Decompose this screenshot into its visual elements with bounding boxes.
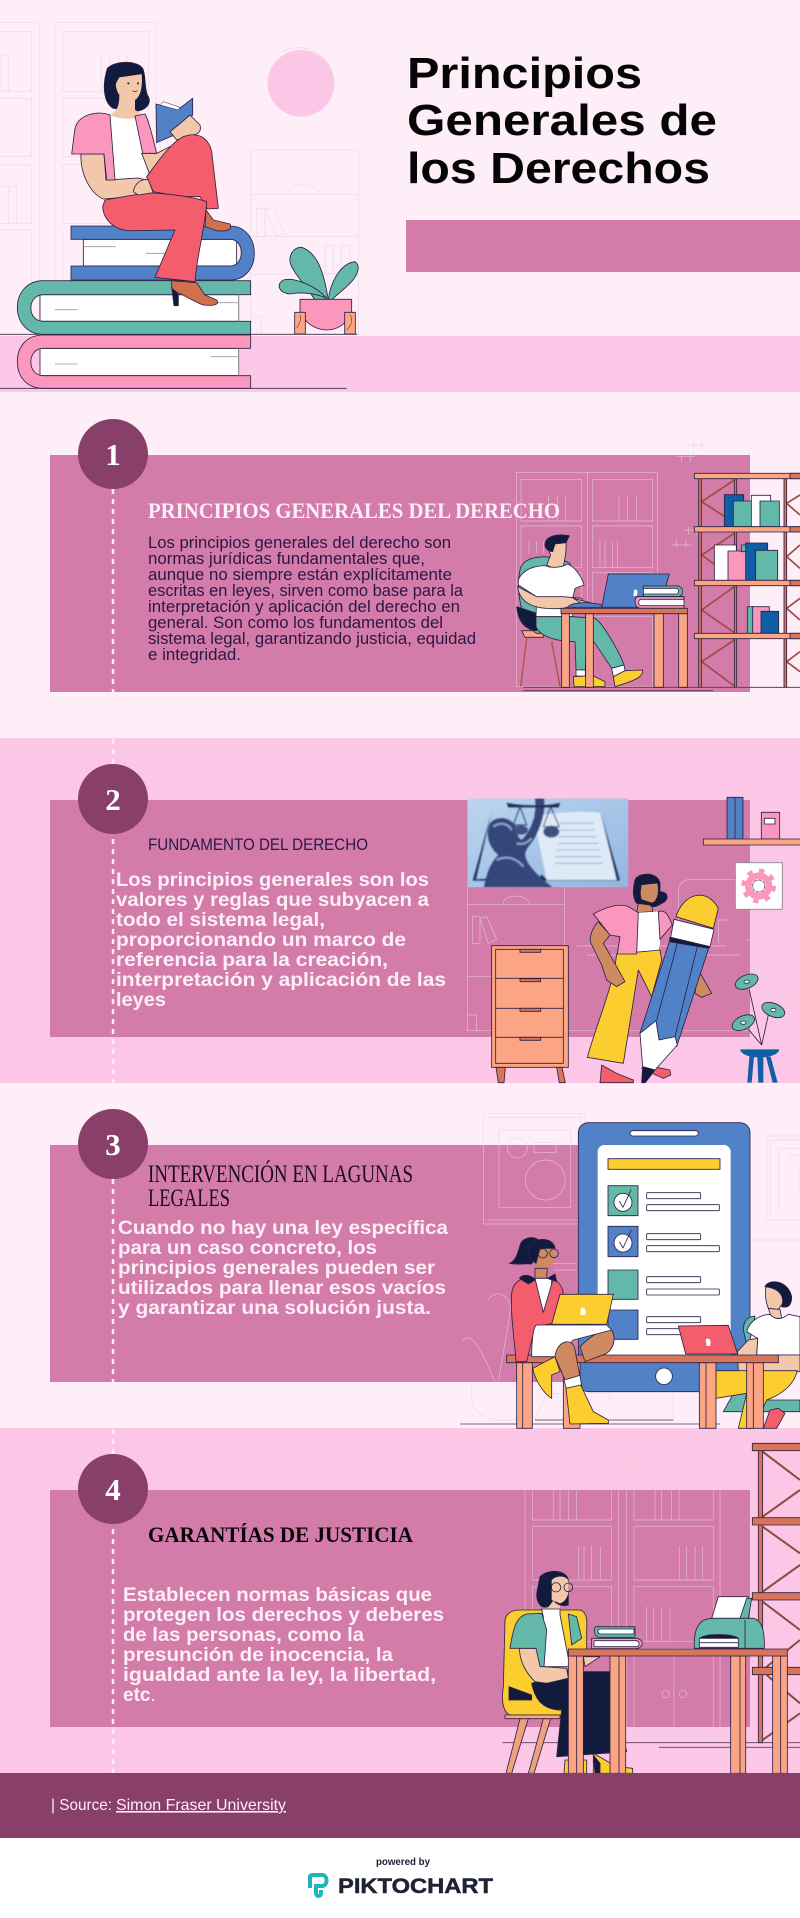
icon: green book [17, 281, 251, 334]
title: Generales de [407, 96, 717, 145]
title [407, 49, 717, 193]
timeline dotted line [112, 489, 114, 1773]
text block: section 2: todo el sistema legal, [116, 910, 325, 931]
text block: section 4 [123, 1585, 444, 1706]
heading: section 4: GARANTÍAS DE JUSTICIA [148, 1522, 413, 1547]
text block: section 1: normas jurídicas fundamentales que, [148, 550, 425, 568]
text block: section 1: escritas en leyes, sirven como base para la [148, 582, 464, 600]
text block: section 3: Cuando no hay una ley específica [118, 1218, 448, 1239]
step 2 badge: 2 [105, 782, 121, 817]
heading: section 3: LEGALES [148, 1185, 230, 1212]
heading: section 2: FUNDAMENTO DEL DERECHO [148, 836, 368, 854]
powered by label: powered by [376, 1857, 430, 1868]
illustration: two people with giant phone checklist [460, 1113, 800, 1428]
text block: section 2: interpretación y aplicación de las [116, 970, 446, 991]
illustration: woman at desk with printer and scaffold shelf [502, 1443, 800, 1773]
heading: section 1: PRINCIPIOS GENERALES DEL DERECHO [148, 498, 560, 523]
title: los Derechos [407, 144, 710, 193]
text block: section 1: sistema legal, garantizando justicia, equidad [148, 630, 476, 648]
text block: section 1: Los principios generales del derecho son [148, 534, 451, 552]
decorative pink sun [268, 48, 334, 117]
icon: salmon cabinet [492, 946, 568, 1083]
step 4 badge [78, 1454, 148, 1524]
text block: section 1: general. Son como los fundamentos del [148, 614, 443, 632]
text block: section 1: aunque no siempre están explícitamente [148, 566, 452, 584]
table [507, 1355, 778, 1428]
title accent bar [406, 220, 800, 272]
text block: section 1: interpretación y aplicación del derecho en [148, 598, 460, 616]
text block: section 3: principios generales pueden ser [118, 1258, 436, 1279]
step 3 badge: 3 [105, 1127, 121, 1162]
icon: book stack [592, 1627, 642, 1649]
text block: section 2: proporcionando un marco de [116, 930, 406, 951]
text block: section 2 [116, 870, 446, 1011]
source line: | Source: [51, 1797, 112, 1814]
text block: section 2: leyes [116, 990, 166, 1011]
step 3 badge [78, 1109, 148, 1179]
heading: section 3 [148, 1160, 413, 1212]
text block: section 2: valores y reglas que subyacen a [116, 890, 429, 911]
step 2 badge [78, 764, 148, 834]
illustration: man at desk with bookshelf [516, 442, 800, 691]
heading: section 3: INTERVENCIÓN EN LAGUNAS [148, 1160, 413, 1188]
text block: section 3: para un caso concreto, los [118, 1238, 377, 1259]
icon: gear in frame [735, 863, 782, 909]
woman with pencil [587, 874, 712, 1083]
step 1 badge: 1 [105, 437, 121, 472]
text block: section 4: igualdad ante la ley, la libertad, [123, 1665, 436, 1686]
text block: section 4: etc. [123, 1685, 156, 1706]
icon: printer [694, 1597, 764, 1648]
text block: section 3: y garantizar una solución justa. [118, 1298, 431, 1319]
text block: section 3 [118, 1218, 448, 1319]
panel: section 3 [50, 1145, 750, 1382]
man with laptop [517, 535, 684, 687]
icon: giant phone with checklist [578, 1123, 750, 1392]
icon: blue book [71, 226, 254, 280]
footer band [0, 1773, 800, 1838]
text block: section 4: presunción de inocencia, la [123, 1645, 393, 1666]
icon: shelf with books [703, 797, 800, 845]
step 4 badge: 4 [105, 1472, 121, 1507]
text block: section 4: Establecen normas básicas que [123, 1585, 432, 1606]
text block: section 2: referencia para la creación, [116, 950, 388, 971]
text block: section 3: utilizados para llenar esos vacíos [118, 1278, 446, 1299]
logo: Piktochart: PIKTOCHART [338, 1875, 493, 1898]
desk [568, 1649, 787, 1773]
panel: section 1 [50, 455, 750, 692]
icon: plant on stool [730, 971, 787, 1083]
source line: Simon Fraser University [116, 1797, 286, 1814]
woman on left with yellow laptop [509, 1238, 614, 1424]
text block: section 1 [148, 534, 476, 664]
illustration: woman with giant pencil [467, 797, 800, 1083]
text block: section 2: Los principios generales son los [116, 870, 429, 891]
title: Principios [407, 49, 642, 98]
panel: section 2 [50, 800, 750, 1037]
woman reading [72, 62, 231, 306]
icon: pink book [17, 335, 251, 388]
hero illustration: woman reading on stacked books [0, 23, 358, 388]
text block: section 1: e integridad. [148, 646, 241, 664]
bookshelf [694, 473, 800, 687]
desk [561, 608, 687, 687]
woman on yellow chair [502, 1571, 633, 1773]
scaffold shelf [752, 1443, 800, 1743]
photo: statue of justice over open book [467, 798, 628, 887]
panel: section 4 [50, 1490, 750, 1727]
text block: section 4: de las personas, como la [123, 1625, 364, 1646]
person on right with headphones [678, 1282, 800, 1428]
icon: plant in pink pot [279, 247, 358, 334]
text block: section 4: protegen los derechos y deberes [123, 1605, 444, 1626]
step 1 badge [78, 419, 148, 489]
icon: giant pencil [640, 895, 718, 1083]
